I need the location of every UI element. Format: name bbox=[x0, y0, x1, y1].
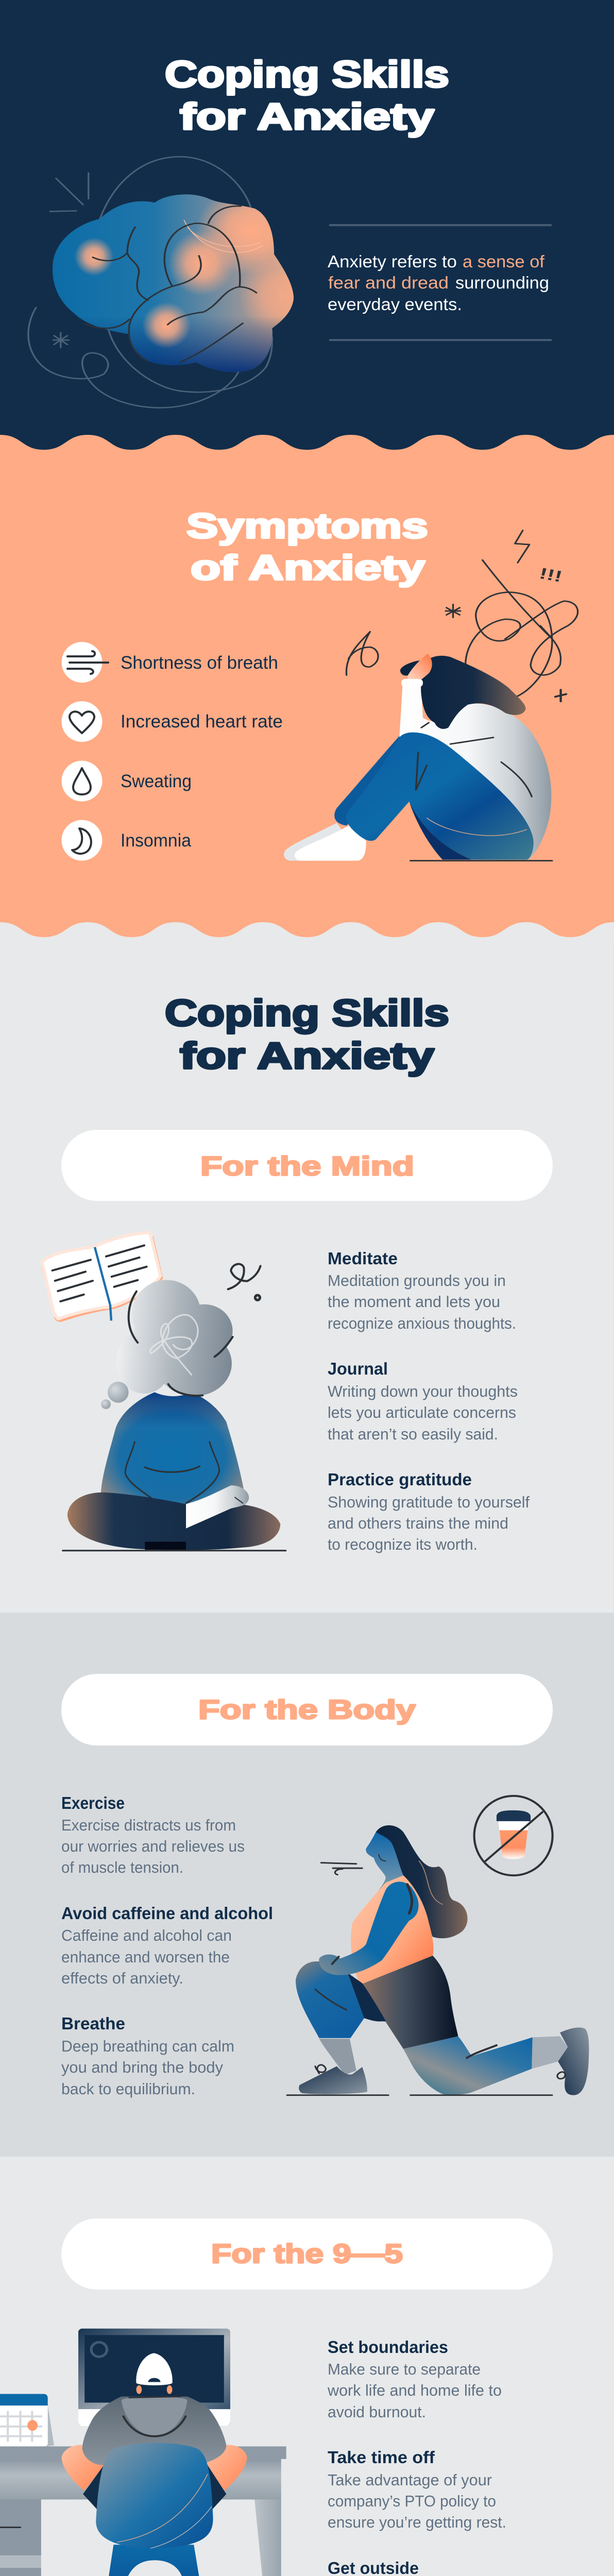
shorts bbox=[362, 1956, 458, 2049]
heading: symptoms: of Anxiety bbox=[191, 548, 425, 587]
tip: exercise: of muscle tension. bbox=[61, 1858, 183, 1876]
hood bbox=[122, 2397, 187, 2436]
illustration: person at desk bbox=[0, 2329, 286, 2576]
panel: hero background bbox=[0, 0, 614, 464]
thought cloud bbox=[101, 1280, 233, 1409]
hand and cuff bbox=[400, 654, 432, 687]
pill: for the mind: For the Mind bbox=[200, 1151, 414, 1181]
front sock and shoe bbox=[299, 2039, 367, 2094]
no coffee icon bbox=[474, 1796, 553, 1875]
symptom: sweating bbox=[62, 760, 192, 802]
scribbles above head bbox=[346, 531, 578, 701]
illustration: sitting anxious person bbox=[284, 531, 578, 861]
tip: meditate: Meditation grounds you in bbox=[328, 1272, 506, 1290]
tip: breathe: back to equilibrium. bbox=[61, 2080, 195, 2098]
inner thigh bbox=[348, 1973, 386, 2022]
tip: exercise: Exercise bbox=[61, 1793, 125, 1812]
tip: exercise: our worries and relieves us bbox=[61, 1837, 245, 1855]
brain blob bbox=[53, 194, 294, 372]
symptom: shortness of breath bbox=[62, 642, 278, 683]
tip: journal: that aren’t so easily said. bbox=[328, 1425, 498, 1443]
monitor bbox=[78, 2329, 230, 2426]
calendar bbox=[0, 2394, 54, 2446]
heading: coping skills: for Anxiety bbox=[180, 1036, 434, 1077]
illustration: lunging woman bbox=[287, 1796, 589, 2095]
illustration: meditating person bbox=[41, 1232, 286, 1551]
tip: avoid caffeine and alcohol: Caffeine and alcohol can bbox=[61, 1926, 232, 1944]
text: mind tips bbox=[328, 1249, 530, 1553]
pill: for the body bbox=[61, 1674, 553, 1745]
back leg bbox=[334, 736, 407, 825]
symptom: sweating: Sweating bbox=[121, 771, 192, 791]
symptom: increased heart rate bbox=[62, 701, 283, 742]
symptom: insomnia: Insomnia bbox=[121, 831, 192, 851]
forearms bbox=[61, 2445, 247, 2511]
intro text block: Anxiety refers to bbox=[328, 252, 457, 271]
tip: set boundaries bbox=[327, 2337, 502, 2421]
front leg bbox=[346, 733, 534, 860]
front leg bbox=[296, 1961, 386, 2038]
symptom: increased heart rate: Increased heart rate bbox=[121, 711, 283, 732]
tip: practice gratitude: to recognize its worth. bbox=[328, 1535, 477, 1553]
intro text block bbox=[328, 224, 552, 341]
floor lines bbox=[287, 2094, 552, 2096]
torso bbox=[399, 685, 551, 860]
head and neck bbox=[366, 1832, 403, 1904]
tip: breathe bbox=[61, 2014, 234, 2098]
arm bbox=[319, 1882, 419, 1975]
cap and head bbox=[136, 2353, 173, 2398]
symptom list bbox=[62, 642, 283, 860]
tip: avoid caffeine and alcohol bbox=[61, 1904, 273, 1987]
tip: meditate: recognize anxious thoughts. bbox=[328, 1314, 516, 1332]
torso and legs bbox=[63, 1392, 286, 1551]
tip: set boundaries: avoid burnout. bbox=[328, 2403, 426, 2421]
tip: set boundaries: Set boundaries bbox=[328, 2337, 448, 2357]
tip: practice gratitude: Practice gratitude bbox=[328, 1470, 472, 1489]
back leg bbox=[403, 2036, 533, 2095]
title bbox=[165, 54, 449, 138]
tip: journal bbox=[328, 1359, 518, 1443]
torso top bbox=[351, 1875, 434, 1985]
heading: coping skills: Coping Skills bbox=[165, 993, 449, 1034]
pill: for the 9-5: For the 9—5 bbox=[211, 2239, 403, 2269]
hair bbox=[421, 656, 525, 729]
pill: for the body: For the Body bbox=[198, 1695, 416, 1725]
title: for Anxiety bbox=[180, 96, 434, 138]
tip: take time off bbox=[328, 2448, 506, 2531]
tip: breathe: Deep breathing can calm bbox=[61, 2037, 234, 2055]
text: 9-5 tips bbox=[327, 2337, 542, 2576]
scribbles above head: !!! bbox=[537, 565, 564, 586]
tip: meditate: Meditate bbox=[328, 1249, 398, 1268]
panel: symptoms background with wave bbox=[0, 435, 614, 943]
tip: take time off: ensure you’re getting rest. bbox=[328, 2513, 506, 2531]
intro text block: surrounding bbox=[455, 273, 549, 292]
tip: meditate bbox=[328, 1249, 516, 1332]
tip: set boundaries: work life and home life to bbox=[327, 2381, 502, 2399]
tip: practice gratitude: Showing gratitude to yourself bbox=[328, 1493, 530, 1511]
tip: journal: Journal bbox=[328, 1359, 388, 1378]
strokes bbox=[315, 1854, 497, 2058]
tip: take time off: Take advantage of your bbox=[328, 2471, 492, 2489]
heading: coping skills bbox=[165, 993, 449, 1077]
chair legs bbox=[100, 2545, 209, 2576]
text: body tips bbox=[61, 1793, 273, 2098]
brain folds bbox=[86, 206, 257, 362]
tip: exercise bbox=[61, 1793, 245, 1876]
tip: meditate: the moment and lets you bbox=[328, 1293, 500, 1311]
floor line bbox=[411, 859, 552, 862]
tip: set boundaries: Make sure to separate bbox=[328, 2360, 481, 2378]
tip: avoid caffeine and alcohol: Avoid caffeine and alcohol bbox=[61, 1904, 273, 1923]
hoodie bbox=[82, 2397, 226, 2465]
feet bbox=[284, 823, 366, 861]
leg shadow bbox=[409, 802, 472, 860]
intro text block: fear and dread bbox=[328, 273, 449, 292]
tip: journal: lets you articulate concerns bbox=[328, 1403, 516, 1421]
tip: exercise: Exercise distracts us from bbox=[61, 1816, 236, 1834]
illustration: brain bbox=[28, 157, 325, 408]
chair back bbox=[96, 2443, 213, 2548]
breath lines bbox=[321, 1863, 362, 1875]
pill: for the mind bbox=[61, 1130, 553, 1201]
intro text block: a sense of bbox=[463, 252, 545, 271]
intro text block: everyday events. bbox=[328, 295, 462, 314]
tip: avoid caffeine and alcohol: effects of anxiety. bbox=[61, 1969, 183, 1987]
tip: avoid caffeine and alcohol: enhance and worsen the bbox=[61, 1948, 230, 1966]
desk bbox=[0, 2446, 286, 2576]
symptom: insomnia bbox=[62, 820, 192, 860]
symptom: shortness of breath: Shortness of breath bbox=[121, 653, 278, 673]
pill: for the 9-5 bbox=[61, 2218, 553, 2290]
heading: symptoms bbox=[186, 506, 428, 587]
open book bbox=[41, 1232, 163, 1322]
clothing fold lines bbox=[416, 723, 532, 836]
doodle near cloud bbox=[228, 1264, 261, 1300]
tip: take time off: Take time off bbox=[328, 2448, 435, 2467]
tip: take time off: company’s PTO policy to bbox=[328, 2492, 496, 2510]
panel: body section background bbox=[0, 1613, 614, 2157]
panel: 9-5 section background bbox=[0, 2157, 614, 2576]
title: Coping Skills bbox=[165, 54, 449, 95]
hair bbox=[376, 1825, 468, 1938]
brain outline doodles bbox=[28, 157, 272, 408]
tip: breathe: you and bring the body bbox=[61, 2058, 223, 2076]
tip: journal: Writing down your thoughts bbox=[328, 1382, 518, 1400]
tip: practice gratitude: and others trains the mind bbox=[328, 1514, 508, 1532]
heading: symptoms: Symptoms bbox=[186, 506, 428, 546]
panel: coping skills background with wave bbox=[0, 922, 614, 1613]
tip: breathe: Breathe bbox=[61, 2014, 125, 2033]
tip: practice gratitude bbox=[328, 1470, 530, 1553]
back sock and shoe bbox=[532, 2027, 589, 2095]
